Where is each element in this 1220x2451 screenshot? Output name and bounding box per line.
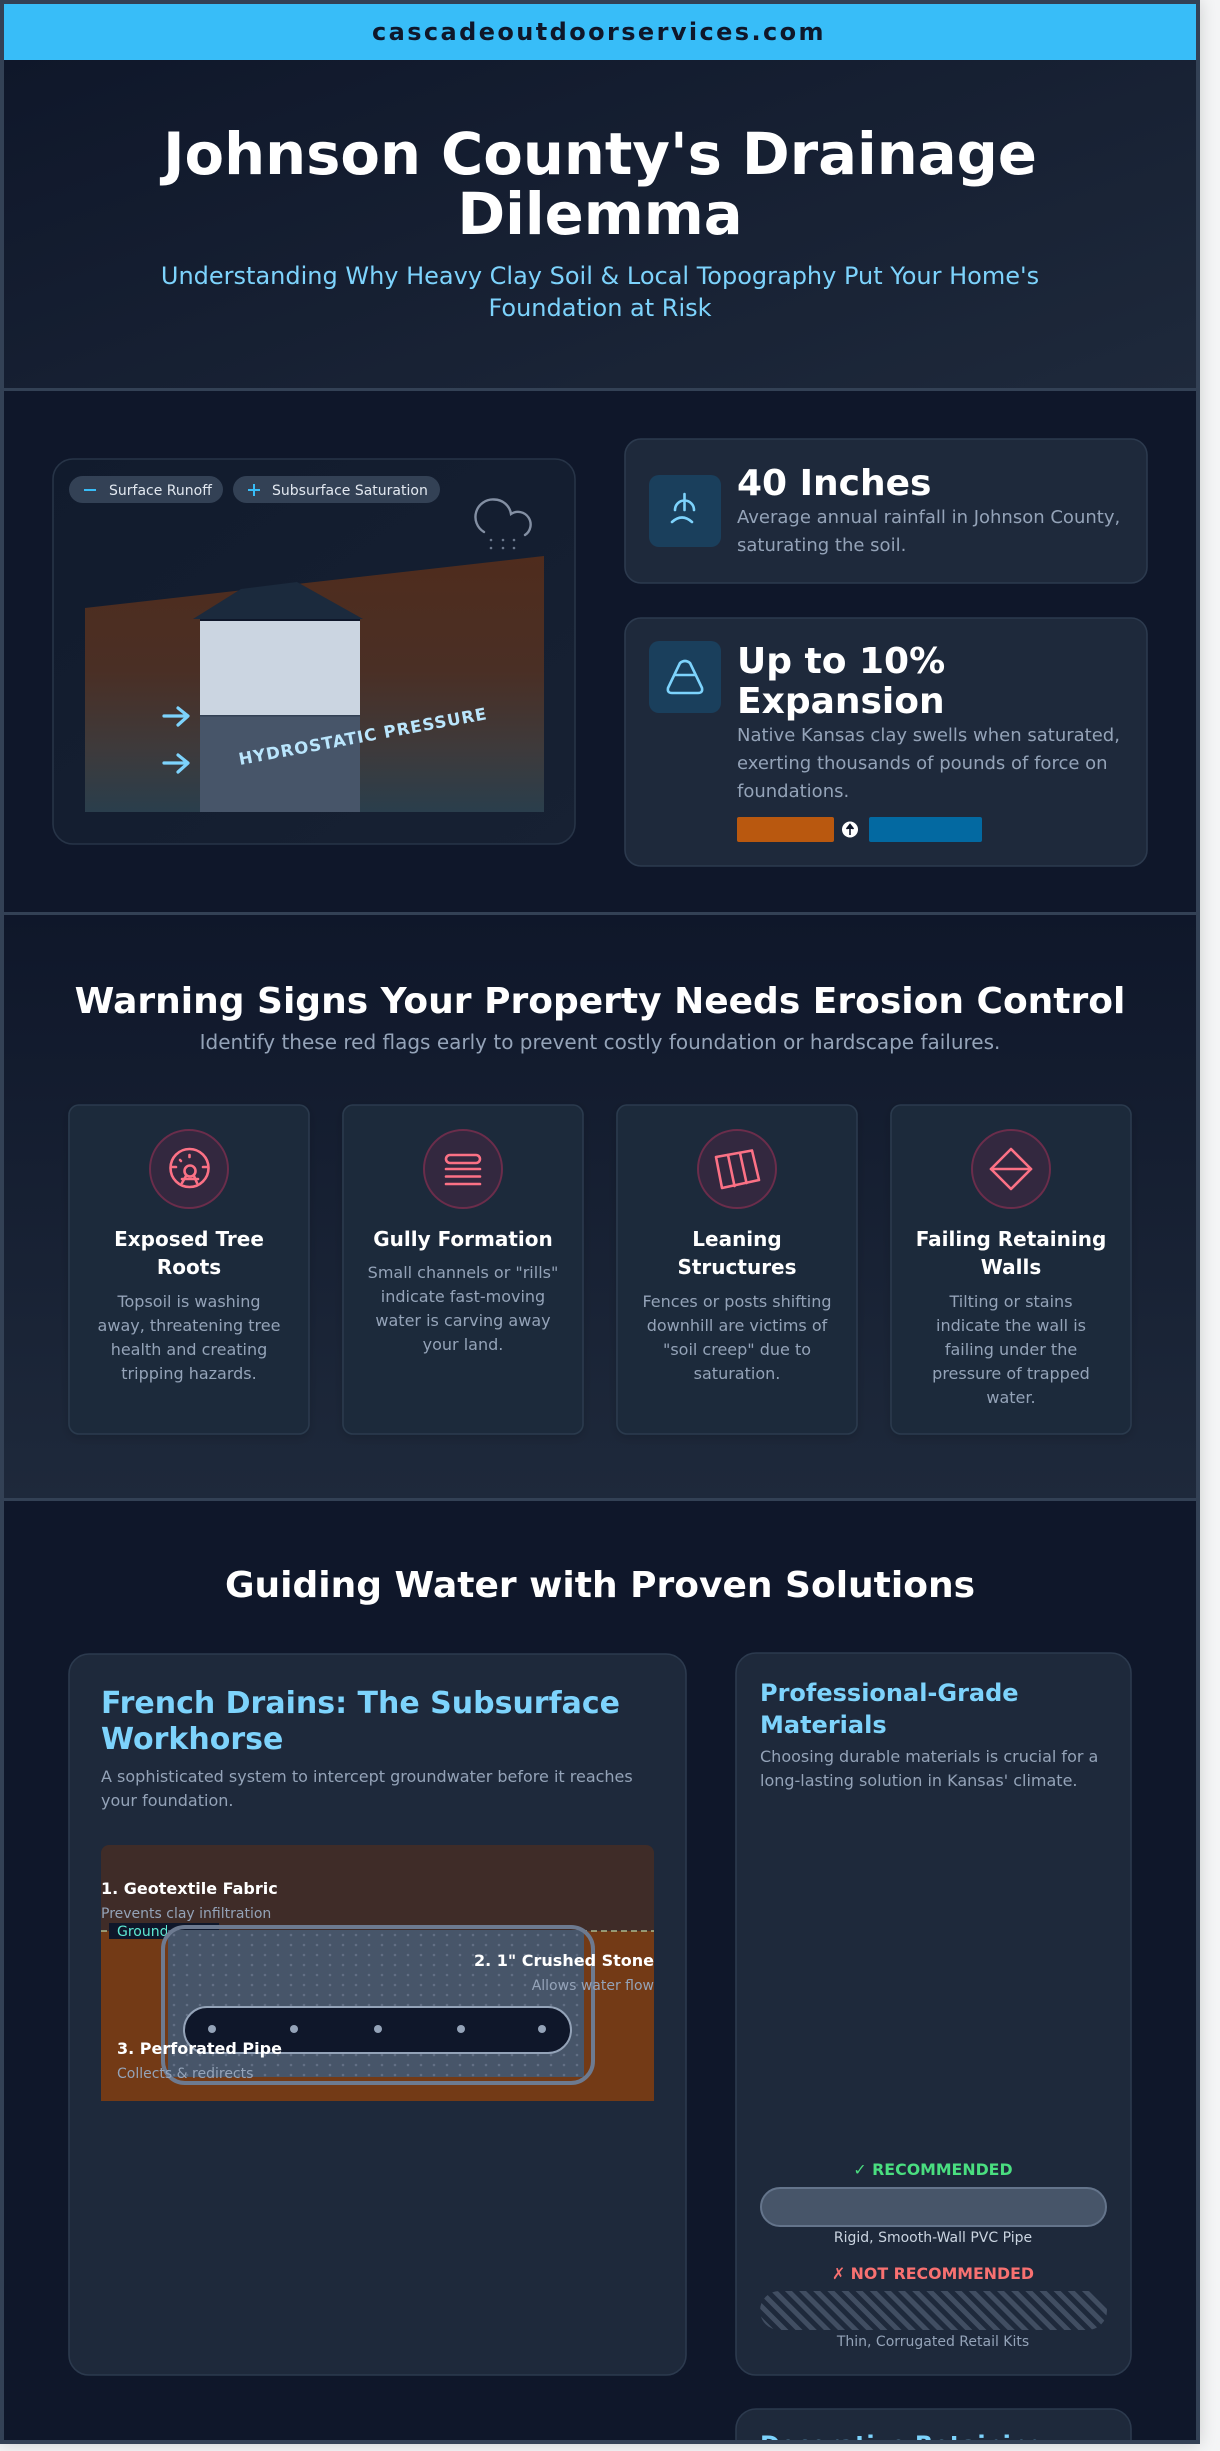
panel heading: Professional-Grade xyxy=(760,1679,1019,1707)
icon: tree roots xyxy=(150,1130,228,1208)
ground level line xyxy=(101,1923,654,1940)
subtitle: Understanding Why Heavy Clay Soil & Local Topography Put Your Home's xyxy=(161,262,1039,290)
top domain bar: cascadeoutdoorservices.com xyxy=(372,18,826,46)
panel heading: Workhorse xyxy=(101,1722,283,1757)
stat card: rainfall: 40 Inches xyxy=(737,463,931,504)
title: Dilemma xyxy=(457,181,743,248)
title: Johnson County's Drainage xyxy=(159,121,1037,188)
legend pill: subsurface saturation: Subsurface Saturation xyxy=(272,483,428,499)
panel description: Choosing durable materials is crucial for a xyxy=(760,1747,1098,1766)
legend pill: surface runoff xyxy=(69,476,223,503)
section heading: Guiding Water with Proven Solutions xyxy=(225,1565,975,1606)
house xyxy=(193,582,363,812)
card: failing retaining walls: failing under the xyxy=(945,1340,1077,1359)
icon: gully channels xyxy=(424,1130,502,1208)
label: geotextile fabric xyxy=(102,1882,277,1921)
card: exposed tree roots: Topsoil is washing xyxy=(116,1292,261,1311)
card: leaning structures: "soil creep" due to xyxy=(663,1340,811,1359)
icon: failing wall xyxy=(972,1130,1050,1208)
recommended pipe xyxy=(761,2160,1106,2246)
hydrostatic pressure label: HYDROSTATIC PRESSURE xyxy=(237,704,489,769)
section: problem xyxy=(4,391,1196,915)
label: crushed stone: 2. 1" Crushed Stone xyxy=(474,1951,654,1970)
card: failing retaining walls: Failing Retaining xyxy=(916,1227,1106,1251)
panel description: your foundation. xyxy=(101,1791,233,1810)
recommended pipe: Rigid, Smooth-Wall PVC Pipe xyxy=(834,2230,1032,2246)
label: perforated pipe xyxy=(117,2039,282,2082)
card: gully formation: Small channels or "rills" xyxy=(368,1263,558,1282)
panel: french drains xyxy=(69,1654,686,2375)
french drain cross-section diagram xyxy=(101,1845,654,2101)
expansion bar graphic xyxy=(737,817,982,842)
soil slope xyxy=(85,556,544,812)
card: exposed tree roots: Roots xyxy=(157,1255,221,1279)
ground level line: Ground Level xyxy=(117,1924,210,1940)
legend pill: subsurface saturation xyxy=(233,476,440,503)
label: perforated pipe: Collects & redirects xyxy=(117,2066,253,2082)
card: failing retaining walls: water. xyxy=(986,1388,1036,1407)
section heading: Warning Signs Your Property Needs Erosion Control xyxy=(75,981,1125,1022)
stat card: expansion: Native Kansas clay swells when saturated, xyxy=(737,725,1120,746)
card: leaning structures: Structures xyxy=(677,1255,797,1279)
icon: clay expansion xyxy=(649,641,721,713)
panel heading: Materials xyxy=(760,1711,887,1739)
section: warning signs xyxy=(4,986,1196,1501)
stat card: expansion: foundations. xyxy=(737,781,849,802)
card: gully formation: your land. xyxy=(423,1335,503,1354)
card: failing retaining walls xyxy=(891,1105,1131,1434)
section subheading: Identify these red flags early to prevent costly foundation or hardscape failures. xyxy=(200,1030,1000,1054)
icon: rainfall xyxy=(649,475,721,547)
panel: hydrostatic pressure diagram xyxy=(53,459,575,844)
card: leaning structures: downhill are victims of xyxy=(647,1316,828,1335)
top domain bar xyxy=(4,4,1196,60)
stat card: rainfall: saturating the soil. xyxy=(737,535,906,556)
header section xyxy=(4,60,1196,391)
perforated pipe xyxy=(184,2007,571,2053)
card: failing retaining walls: Walls xyxy=(981,1255,1041,1279)
label: crushed stone xyxy=(475,1954,654,1990)
stat card: rainfall: Average annual rainfall in Johnson County, xyxy=(737,507,1120,528)
subtitle: Foundation at Risk xyxy=(488,294,712,322)
icon: rain cloud xyxy=(475,499,531,549)
card: failing retaining walls: Tilting or stains xyxy=(948,1292,1073,1311)
label: perforated pipe: 3. Perforated Pipe xyxy=(117,2039,282,2058)
label: crushed stone: Allows water flow xyxy=(532,1978,654,1994)
panel description: long-lasting solution in Kansas' climate. xyxy=(760,1771,1078,1790)
section: solutions xyxy=(68,1570,1132,2440)
label: geotextile fabric: 1. Geotextile Fabric xyxy=(101,1879,278,1898)
card: gully formation: Gully Formation xyxy=(373,1227,553,1251)
panel: decorative retaining walls (cut off) xyxy=(736,2409,1131,2441)
card: exposed tree roots: health and creating xyxy=(111,1340,267,1359)
panel description: A sophisticated system to intercept groundwater before it reaches xyxy=(101,1767,633,1786)
panel: professional-grade materials xyxy=(736,1653,1131,2375)
stat card: expansion xyxy=(625,618,1147,866)
not recommended pipe xyxy=(760,2264,1107,2350)
arrows: water pressure xyxy=(164,708,188,772)
card: exposed tree roots: Exposed Tree xyxy=(114,1227,264,1251)
card: leaning structures: saturation. xyxy=(694,1364,780,1383)
card: leaning structures: Leaning xyxy=(692,1227,782,1251)
not recommended pipe: Thin, Corrugated Retail Kits xyxy=(836,2334,1029,2350)
icon: leaning fence xyxy=(698,1130,776,1208)
legend pill: surface runoff: Surface Runoff xyxy=(109,483,212,499)
card: leaning structures xyxy=(617,1105,857,1434)
card: gully formation: indicate fast-moving xyxy=(381,1287,545,1306)
not recommended pipe: ✗ NOT RECOMMENDED xyxy=(832,2264,1034,2283)
card: gully formation xyxy=(343,1105,583,1434)
card: leaning structures: Fences or posts shifting xyxy=(642,1292,832,1311)
stat card: rainfall xyxy=(625,439,1147,583)
card: exposed tree roots: away, threatening tree xyxy=(98,1316,280,1335)
card: exposed tree roots xyxy=(69,1105,309,1434)
card: failing retaining walls: pressure of trapped xyxy=(932,1364,1090,1383)
card: failing retaining walls: indicate the wall is xyxy=(936,1316,1086,1335)
stat card: expansion: exerting thousands of pounds of force on xyxy=(737,753,1108,774)
stat card: expansion: Up to 10% xyxy=(737,641,945,682)
stat card: expansion: Expansion xyxy=(737,681,945,722)
card: exposed tree roots: tripping hazards. xyxy=(121,1364,257,1383)
panel heading: French Drains: The Subsurface xyxy=(101,1686,620,1721)
crushed stone trench xyxy=(163,1927,593,2083)
label: geotextile fabric: Prevents clay infiltration xyxy=(101,1906,271,1922)
card: gully formation: water is carving away xyxy=(375,1311,551,1330)
recommended pipe: ✓ RECOMMENDED xyxy=(853,2160,1013,2179)
